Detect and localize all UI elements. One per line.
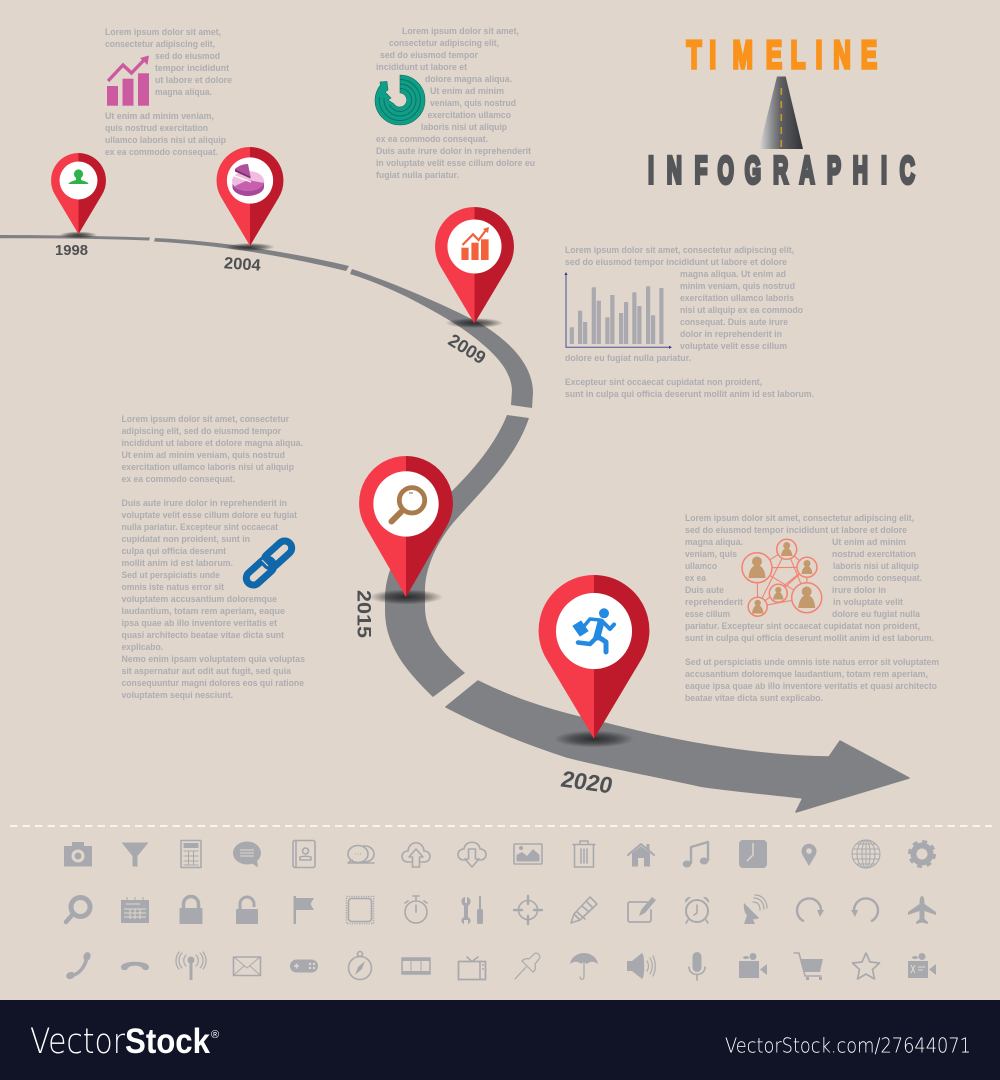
icon: microphone bbox=[689, 952, 705, 980]
text block: 2015: Duis aute irure dolor in reprehenderit in bbox=[122, 498, 287, 508]
icon: umbrella bbox=[570, 953, 598, 979]
text block: 2015: ipsa quae ab illo inventore veritatis et bbox=[122, 618, 277, 628]
footer logo: ® bbox=[211, 1029, 219, 1041]
pin: 2004 bbox=[217, 147, 283, 251]
text block: 2015: quasi architecto beatae vitae dicta sunt bbox=[122, 630, 284, 640]
text block: 2009 bbox=[565, 245, 814, 399]
text block: 2020: accusantium doloremque laudantium, totam rem aperiam, bbox=[685, 669, 928, 679]
text block: 2015: Sed ut perspiciatis unde bbox=[122, 570, 220, 580]
icon: music notes bbox=[683, 842, 708, 868]
icon grid bbox=[64, 840, 936, 980]
icon: camera bbox=[64, 842, 92, 866]
text block: 2009: minim veniam, quis nostrud bbox=[680, 281, 795, 291]
icon: map pin bbox=[802, 844, 816, 866]
year label: 2004: 2004 bbox=[223, 254, 262, 275]
text block: 2004: laboris nisi ut aliquip bbox=[421, 122, 507, 132]
icon: globe bbox=[852, 840, 880, 868]
text block: 2009: dolore eu fugiat nulla pariatur. bbox=[565, 353, 691, 363]
text block: 2020: beatae vitae dicta sunt explicabo. bbox=[685, 693, 823, 703]
timeline road bbox=[0, 235, 909, 812]
footer bar bbox=[0, 1000, 1000, 1080]
icon: open lock bbox=[236, 897, 258, 924]
text block: 1998: ut labore et dolore bbox=[155, 75, 232, 85]
year label: 2009: 2009 bbox=[445, 330, 489, 368]
text block: 2009: consequat. Duis aute irure bbox=[680, 317, 788, 327]
icon: game controller bbox=[290, 960, 318, 972]
text block: 2015 bbox=[122, 414, 305, 700]
icon: tools bbox=[461, 896, 483, 924]
icon: calculator bbox=[181, 840, 201, 868]
year label: 2015: 2015 bbox=[352, 590, 374, 638]
text block: 1998: sed do eiusmod bbox=[155, 51, 220, 61]
text block: 2020: eaque ipsa quae ab illo inventore veritatis et quasi architecto bbox=[685, 681, 937, 691]
text block: 2015: sit aspernatur aut odit aut fugit, sed quia bbox=[122, 666, 292, 676]
icon: pencil bbox=[571, 897, 597, 923]
text block: 2009: sunt in culpa qui officia deserunt mollit anim id est laborum. bbox=[565, 389, 814, 399]
icon: phone handset bbox=[65, 951, 92, 980]
text block: 2015: Lorem ipsum dolor sit amet, consectetur bbox=[122, 414, 289, 424]
icon: crosshair bbox=[514, 896, 542, 924]
icon: undo arrow bbox=[851, 897, 880, 924]
text block: 2015: explicabo. bbox=[122, 642, 163, 652]
text block: 1998: tempor incididunt bbox=[155, 63, 229, 73]
text block: 2004: veniam, quis nostrud bbox=[430, 98, 516, 108]
text block: 2009: Excepteur sint occaecat cupidatat non proident, bbox=[565, 377, 762, 387]
icon: teal radial chart bbox=[375, 75, 425, 125]
icon: orange growth chart bbox=[461, 227, 489, 260]
text block: 2020: Duis aute bbox=[685, 585, 724, 595]
text block: 1998: ex ea commodo consequat. bbox=[105, 147, 218, 157]
title: INFOGRAPHIC: INFOGRAPHIC bbox=[648, 150, 915, 192]
icon: gear bbox=[910, 842, 934, 866]
pin: 1998 bbox=[51, 153, 106, 238]
icon: house bbox=[628, 844, 654, 866]
text block: 2009: voluptate velit esse cillum bbox=[680, 341, 787, 351]
text block: 2004: Lorem ipsum dolor sit amet, bbox=[402, 26, 519, 36]
text block: 2020: Ut enim ad minim bbox=[832, 537, 906, 547]
icon: flag bbox=[294, 896, 314, 924]
footer logo bbox=[30, 1022, 219, 1062]
text block: 2015: voluptatem sequi nesciunt. bbox=[122, 690, 233, 700]
icon: compass bbox=[348, 952, 372, 980]
icon: chip bbox=[346, 896, 374, 924]
text block: 2020: sed do eiusmod tempor incididunt ut labore et dolore bbox=[685, 525, 907, 535]
icon: cloud upload bbox=[402, 843, 430, 867]
text block: 2015: culpa qui officia deserunt bbox=[122, 546, 226, 556]
icon: 3D pie chart bbox=[232, 164, 264, 196]
text block: 2004: incididunt ut labore et bbox=[376, 62, 467, 72]
icon: picture bbox=[514, 844, 542, 864]
text block: 2020: ullamco bbox=[685, 561, 717, 571]
icon: star bbox=[852, 953, 880, 979]
icon: chat bubbles bbox=[348, 846, 374, 863]
text block: 2020: Sed ut perspiciatis unde omnis iste natus error sit voluptatem bbox=[685, 657, 939, 667]
text block: 2004: in voluptate velit esse cillum dolore eu bbox=[376, 158, 535, 168]
text block: 2015: incididunt ut labore et dolore magna aliqua. bbox=[122, 438, 303, 448]
text block: 2009: exercitation ullamco laboris bbox=[680, 293, 794, 303]
text block: 2004: ex ea commodo consequat. bbox=[376, 134, 488, 144]
text block: 2020: in voluptate velit bbox=[833, 597, 903, 607]
text block: 1998: magna aliqua. bbox=[155, 87, 212, 97]
text block: 2020: commodo consequat. bbox=[833, 573, 922, 583]
icon: video camera with label bbox=[908, 953, 936, 978]
text block: 2015: mollit anim id est laborum. bbox=[122, 558, 233, 568]
icon: closed lock bbox=[180, 896, 202, 924]
icon: speaker bbox=[627, 953, 655, 979]
text block: 2015: adipiscing elit, sed do eiusmod tempor bbox=[122, 426, 281, 436]
icon: magnifier bbox=[392, 488, 425, 522]
text block: 2020: esse cillum bbox=[685, 609, 730, 619]
dashed divider bbox=[10, 825, 992, 827]
pin: 2009 bbox=[435, 207, 514, 328]
text block: 2020: sunt in culpa qui officia deserunt mollit anim id est laborum. bbox=[685, 633, 934, 643]
text block: 2020: dolore eu fugiat nulla bbox=[832, 609, 921, 619]
text block: 2004 bbox=[376, 26, 535, 180]
text block: 2020 bbox=[685, 513, 939, 703]
icon: speech bubble bbox=[233, 842, 261, 868]
icon: edit note bbox=[628, 897, 656, 922]
icon: television bbox=[458, 957, 486, 980]
text block: 2020: reprehenderit bbox=[685, 597, 743, 607]
text block: 1998: Ut enim ad minim veniam, bbox=[105, 111, 214, 121]
text block: 2004: consectetur adipiscing elit, bbox=[389, 38, 499, 48]
text block: 1998: quis nostrud exercitation bbox=[105, 123, 208, 133]
icon: search bbox=[66, 898, 90, 922]
text block: 2015: omnis iste natus error sit bbox=[122, 582, 224, 592]
year label: 2020: 2020 bbox=[559, 766, 615, 798]
icon: funnel bbox=[122, 842, 148, 866]
text block: 2015: cupidatat non proident, sunt in bbox=[122, 534, 250, 544]
text block: 2015: consequuntur magni dolores eos qui ratione bbox=[122, 678, 304, 688]
icon: shopping cart bbox=[794, 953, 823, 980]
text block: 2004: sed do eiusmod tempor bbox=[380, 50, 478, 60]
text block: 2020: magna aliqua. bbox=[685, 537, 743, 547]
text block: 2015: voluptate velit esse cillum dolore eu fugiat bbox=[122, 510, 297, 520]
bar chart bbox=[564, 272, 672, 349]
icon: hang up bbox=[121, 962, 149, 970]
icon: green person bbox=[68, 169, 88, 184]
icon: thumbtack bbox=[515, 953, 540, 979]
icon: antenna bbox=[176, 952, 206, 980]
icon: redo arrow bbox=[795, 897, 824, 924]
text block: 2004: Duis aute irure dolor in reprehenderit bbox=[376, 146, 531, 156]
icon: airplane bbox=[908, 896, 936, 924]
text block: 2015: exercitation ullamco laboris nisi ut aliquip bbox=[122, 462, 294, 472]
icon: square clock bbox=[739, 840, 767, 868]
text block: 2015: ex ea commodo consequat. bbox=[122, 474, 235, 484]
text block: 1998: Lorem ipsum dolor sit amet, bbox=[105, 27, 221, 37]
icon: people network bbox=[742, 539, 822, 616]
icon: running businessman bbox=[573, 608, 614, 652]
icon: alarm clock bbox=[685, 897, 709, 923]
text block: 2004: exercitation ullamco bbox=[428, 110, 511, 120]
footer logo: Vector bbox=[30, 1022, 126, 1062]
title: TIMELINE: TIMELINE bbox=[687, 33, 877, 77]
text block: 2015: voluptatem accusantium doloremque bbox=[122, 594, 277, 604]
text block: 2020: nostrud exercitation bbox=[832, 549, 916, 559]
text block: 2015: laudantium, totam rem aperiam, eaque bbox=[122, 606, 285, 616]
text block: 2015: Nemo enim ipsam voluptatem quia voluptas bbox=[122, 654, 305, 664]
icon: calendar bbox=[121, 897, 149, 923]
pin: 2020 bbox=[539, 575, 649, 748]
text block: 2009: Lorem ipsum dolor sit amet, consectetur adipiscing elit, bbox=[565, 245, 794, 255]
text block: 2009: dolor in reprehenderit in bbox=[680, 329, 782, 339]
icon: film strip bbox=[402, 958, 430, 974]
text block: 2004: dolore magna aliqua. bbox=[425, 74, 512, 84]
year label: 1998: 1998 bbox=[55, 243, 88, 259]
icon: trash can bbox=[573, 841, 595, 867]
text block: 2004: fugiat nulla pariatur. bbox=[376, 170, 459, 180]
text block: 2004: Ut enim ad minim bbox=[430, 86, 504, 96]
icon: satellite dish bbox=[744, 895, 767, 924]
icon: stopwatch bbox=[405, 896, 427, 923]
icon: cloud download bbox=[458, 842, 486, 867]
text block: 2009: sed do eiusmod tempor incididunt ut labore et dolore bbox=[565, 257, 787, 267]
text block: 1998: ullamco laboris nisi ut aliquip bbox=[105, 135, 226, 145]
text block: 2020: ex ea bbox=[685, 573, 707, 583]
text block: 2020: laboris nisi ut aliquip bbox=[833, 561, 919, 571]
icon: chain link bbox=[243, 538, 295, 588]
text block: 2020: pariatur. Excepteur sint occaecat cupidatat non proident, bbox=[685, 621, 920, 631]
icon: video camera bbox=[739, 953, 767, 978]
text block: 2020: irure dolor in bbox=[832, 585, 886, 595]
text block: 2009: magna aliqua. Ut enim ad bbox=[680, 269, 786, 279]
icon: growth chart bbox=[107, 56, 149, 106]
pin: 2015 bbox=[359, 456, 453, 604]
footer logo: Stock bbox=[125, 1022, 210, 1061]
icon: contact book bbox=[293, 840, 315, 868]
text block: 1998 bbox=[105, 27, 232, 157]
text block: 2020: Lorem ipsum dolor sit amet, consectetur adipiscing elit, bbox=[685, 513, 914, 523]
road icon bbox=[759, 76, 803, 149]
icon: envelope bbox=[234, 957, 260, 976]
text block: 2009: nisi ut aliquip ex ea commodo bbox=[680, 305, 803, 315]
text block: 2015: nulla pariatur. Excepteur sint occaecat bbox=[122, 522, 278, 532]
text block: 1998: consectetur adipiscing elit, bbox=[105, 39, 215, 49]
text block: 2020: veniam, quis bbox=[685, 549, 737, 559]
text block: 2015: Ut enim ad minim veniam, quis nostrud bbox=[122, 450, 285, 460]
